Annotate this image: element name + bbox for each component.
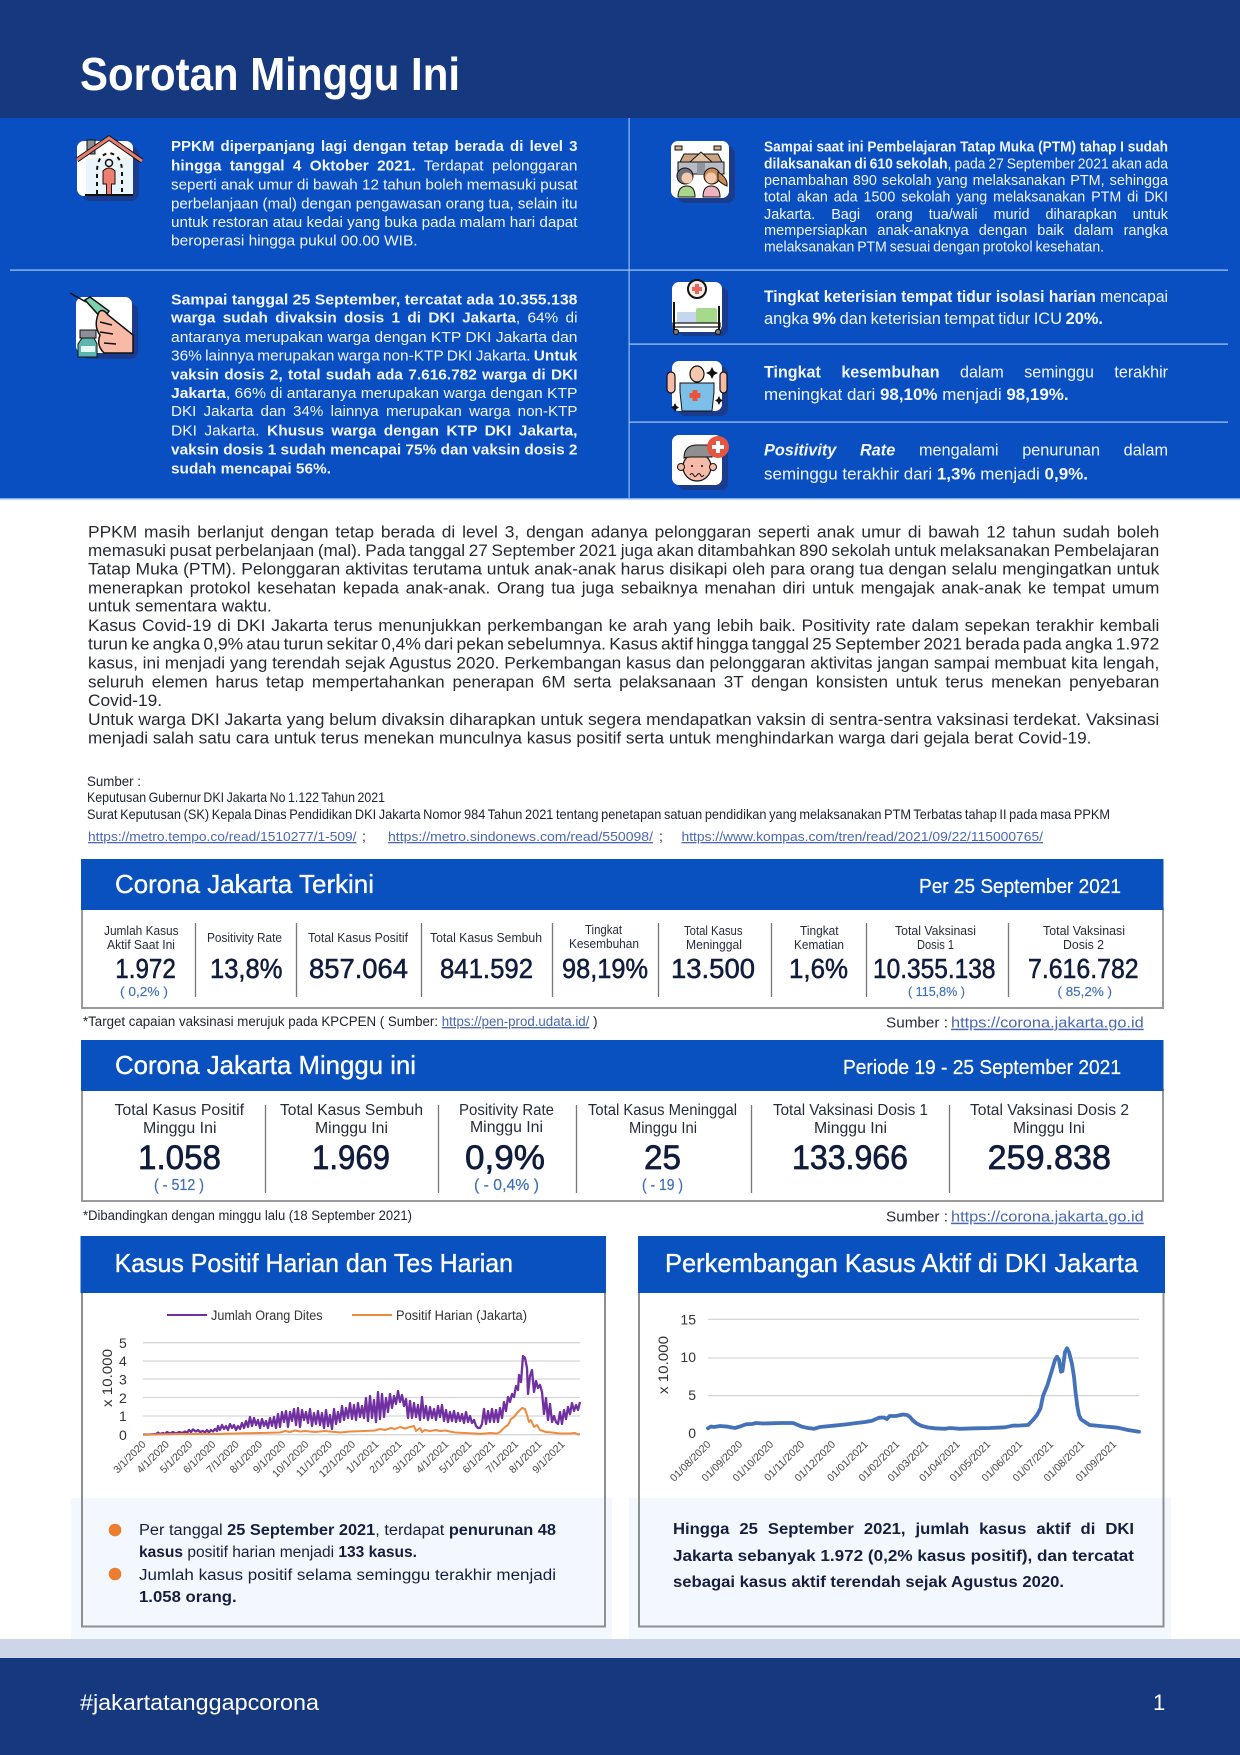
stat: weekly dose 2 bbox=[970, 1102, 1129, 1177]
text: positivity rate bbox=[764, 440, 1168, 484]
date: Per 25 September 2021 bbox=[919, 876, 1121, 898]
text: face-to-face schooling: dilaksanakan di 610 sekolah, pada 27 September 2021 akan ada bbox=[764, 156, 1169, 172]
text: PPKM extended: seperti anak umur di bawah 12 tahun boleh memasuki pusat bbox=[171, 176, 578, 194]
stat: weekly positive: Minggu Ini bbox=[143, 1120, 216, 1137]
source link bbox=[886, 1015, 1144, 1032]
stat: weekly deaths: Total Kasus Meninggal bbox=[588, 1102, 737, 1119]
text block: narrative summary: kasus, ini menjadi yang terendah sejak Agustus 2020. Perkembangan kasus dan pelonggaran aktivitas jangan sampai membuat kita lengah, bbox=[88, 653, 1159, 672]
x axis dates: 01/01/2021 bbox=[825, 1439, 871, 1484]
text block: narrative summary: memasuki pusat perbelanjaan (mal). Pada tanggal 27 September 2021 juga akan ditambahkan 890 sekolah untuk melaksanakan Pembelajaran bbox=[88, 541, 1159, 560]
x axis dates: 1/1/2021 bbox=[344, 1439, 381, 1476]
stat: vaccine dose 1: Dosis 1 bbox=[917, 937, 954, 952]
hashtag: #jakartatanggapcorona bbox=[80, 1690, 320, 1715]
stat: weekly positivity: 0,9% bbox=[465, 1139, 545, 1177]
stat: weekly recovered: Total Kasus Sembuh bbox=[280, 1102, 423, 1119]
text: PPKM extended: hingga tanggal 4 Oktober 2021. Terdapat pelonggaran bbox=[171, 158, 578, 174]
stat: weekly recovered: Minggu Ini bbox=[315, 1120, 388, 1137]
line chart: daily tests and positives: 4 bbox=[119, 1353, 127, 1369]
footnote: comparison: *Dibandingkan dengan minggu lalu (18 September 2021) bbox=[83, 1208, 412, 1223]
stat: recovery rate bbox=[562, 922, 648, 984]
text block: narrative summary: menjadi salah satu cara untuk terus menekan munculnya kasus positif serta untuk menghindarkan warga dari gejala berat Covid-19. bbox=[88, 728, 1091, 747]
x axis dates: 01/12/2020 bbox=[792, 1439, 838, 1484]
text: active case summary: Hingga 25 September 2021, jumlah kasus aktif di DKI bbox=[673, 1521, 1134, 1538]
text: PPKM extended: PPKM diperpanjang lagi dengan tetap berada di level 3 bbox=[171, 138, 578, 155]
text block: sources: ; bbox=[362, 828, 366, 844]
title: Sorotan Minggu Ini bbox=[80, 48, 460, 100]
text: positivity rate: Positivity Rate mengalami penurunan dalam bbox=[764, 440, 1168, 460]
panel: daily cases and tests bbox=[71, 1236, 612, 1639]
text: vaccination progress: 36% lainnya merupakan warga non-KTP DKI Jakarta. Untuk bbox=[171, 348, 578, 364]
icon: hospital bed bbox=[672, 280, 728, 336]
text block: sources: Keputusan Gubernur DKI Jakarta No 1.122 Tahun 2021 bbox=[87, 789, 385, 805]
text block: sources: https://metro.sindonews.com/read/550098/ bbox=[388, 829, 653, 844]
icon: sick face with plus badge bbox=[672, 435, 729, 490]
text block: sources: https://metro.tempo.co/read/1510277/1-509/ bbox=[88, 829, 357, 844]
text block: narrative summary: Covid-19. bbox=[88, 691, 162, 710]
text: face-to-face schooling: total akan ada 1500 sekolah yang melaksanakan PTM di DKI bbox=[764, 190, 1168, 206]
text: bed occupancy: angka 9% dan keterisian tempat tidur ICU 20%. bbox=[764, 309, 1103, 328]
panel: Corona Jakarta Terkini bbox=[81, 859, 1164, 1008]
source link: https://corona.jakarta.go.id bbox=[951, 1209, 1144, 1226]
text block: sources bbox=[87, 773, 1110, 844]
text: positivity rate: seminggu terakhir dari 1,3% menjadi 0,9%. bbox=[764, 464, 1088, 484]
text: active case summary bbox=[673, 1521, 1134, 1591]
text: vaccination progress: vaksin dosis 1 sudah mencapai 75% dan vaksin dosis 2 bbox=[171, 442, 578, 458]
heading: Kasus Positif Harian dan Tes Harian bbox=[115, 1248, 513, 1278]
text: vaccination progress: warga sudah divaksin dosis 1 di DKI Jakarta , 64% di bbox=[170, 310, 578, 326]
x axis dates bbox=[111, 1439, 568, 1480]
source link: Sumber : bbox=[886, 1209, 948, 1226]
text: recovery rate: Tingkat kesembuhan dalam seminggu terakhir bbox=[764, 362, 1168, 382]
stat: total deaths: Total Kasus bbox=[684, 923, 743, 938]
line chart: daily tests and positives bbox=[99, 1308, 580, 1480]
stat: total positive: Total Kasus Positif bbox=[308, 930, 408, 945]
stat: total deaths: Meninggal bbox=[686, 937, 742, 952]
bullet list: daily cases: Per tanggal 25 September 2021 , terdapat penurunan 48 bbox=[139, 1522, 556, 1539]
stat: total positive: 857.064 bbox=[309, 953, 408, 984]
text: vaccination progress: sudah mencapai 56%. bbox=[171, 460, 331, 478]
text block: narrative summary: Kasus Covid-19 di DKI Jakarta terus menunjukkan perkembangan ke arah yang lebih baik. Positivity rate dalam sepekan terakhir kembali bbox=[88, 616, 1159, 635]
x axis dates: 8/1/2020 bbox=[228, 1439, 265, 1476]
text: vaccination progress: DKI Jakarta. Khusus warga dengan KTP DKI Jakarta, bbox=[171, 422, 578, 440]
stat: positivity rate: Positivity Rate bbox=[207, 930, 282, 945]
text: vaccination progress: Sampai tanggal 25 September, tercatat ada 10.355.138 bbox=[171, 292, 578, 308]
source link: https://corona.jakarta.go.id bbox=[951, 1015, 1144, 1032]
x axis dates: 8/1/2021 bbox=[507, 1439, 544, 1476]
icon: hand with syringe bbox=[70, 293, 138, 359]
stat: weekly positivity bbox=[459, 1102, 554, 1194]
stat: weekly positive: 1.058 bbox=[138, 1139, 221, 1177]
x axis dates: 01/08/2020 bbox=[668, 1439, 714, 1484]
text: PPKM extended: untuk restoran atau kedai yang buka pada malam hari dapat bbox=[171, 214, 578, 231]
text: active case summary: Jakarta sebanyak 1.972 (0,2% kasus positif), dan tercatat bbox=[673, 1548, 1134, 1565]
x axis dates: 01/05/2021 bbox=[947, 1439, 993, 1484]
stat: total recovered: 841.592 bbox=[440, 953, 533, 984]
text block: sources: Sumber : bbox=[87, 773, 141, 789]
text: face-to-face schooling: melaksanakan PTM sesuai dengan protokol kesehatan. bbox=[764, 240, 1104, 256]
stat: vaccine dose 1: Total Vaksinasi bbox=[895, 923, 976, 938]
x axis dates: 3/1/2020 bbox=[111, 1439, 149, 1476]
stat: weekly deaths: 25 bbox=[644, 1139, 681, 1177]
footnote: vaccination target: *Target capaian vaksinasi merujuk pada KPCPEN ( Sumber: https://pen-prod.udata.id/ ) bbox=[83, 1014, 597, 1029]
text: vaccination progress bbox=[170, 292, 578, 478]
line chart: active cases: 0 bbox=[688, 1425, 696, 1441]
text block: narrative summary: menerapkan protokol kesehatan kepada anak-anak. Orang tua juga sebaiknya menahan diri untuk mengajak anak-anak ke tempat umum bbox=[88, 578, 1159, 597]
text block: narrative summary: turun ke angka 0,9% atau turun sekitar 0,4% dari pekan sebelumnya. Kasus aktif hingga tanggal 25 September 2021 berada pada angka 1.972 bbox=[88, 634, 1159, 653]
x axis dates: 01/11/2020 bbox=[762, 1439, 807, 1484]
text block: sources: https://www.kompas.com/tren/read/2021/09/22/115000765/ bbox=[682, 829, 1043, 844]
line chart: active cases: 15 bbox=[680, 1312, 696, 1328]
icon: house with person bbox=[77, 138, 142, 201]
stat: weekly deaths: Minggu Ini bbox=[629, 1120, 697, 1137]
stat: weekly positive bbox=[114, 1102, 245, 1194]
text: active case summary: sebagai kasus aktif terendah sejak Agustus 2020. bbox=[673, 1574, 1064, 1591]
stat: recovery rate: Tingkat bbox=[585, 922, 622, 937]
x axis dates: 7/1/2021 bbox=[484, 1439, 521, 1476]
x axis dates: 3/1/2021 bbox=[391, 1439, 428, 1476]
stat: fatality rate bbox=[789, 923, 848, 984]
x axis dates: 5/1/2020 bbox=[158, 1439, 195, 1476]
line chart: daily tests and positives: 0 bbox=[119, 1427, 127, 1443]
stat: weekly positive: ( - 512 ) bbox=[154, 1177, 204, 1194]
x axis dates: 01/07/2021 bbox=[1010, 1439, 1056, 1484]
stat: weekly dose 2: Minggu Ini bbox=[1013, 1120, 1085, 1137]
x axis dates: 01/02/2021 bbox=[856, 1439, 902, 1484]
x axis dates: 6/1/2020 bbox=[181, 1439, 219, 1476]
x axis dates: 01/09/2020 bbox=[699, 1439, 745, 1484]
header band with title bbox=[0, 0, 1240, 118]
stat: active cases: ( 0,2% ) bbox=[120, 984, 168, 999]
line chart: daily tests and positives: 3 bbox=[119, 1372, 127, 1388]
source link bbox=[886, 1209, 1144, 1226]
text block: narrative summary: Untuk warga DKI Jakarta yang belum divaksin diharapkan untuk segera mendapatkan vaksin di sentra-sentra vaksinasi terdekat. Vaksinasi bbox=[88, 710, 1159, 729]
text: recovery rate bbox=[764, 362, 1168, 404]
stat: vaccine dose 2: 7.616.782 bbox=[1028, 953, 1139, 984]
stat: weekly positive: Total Kasus Positif bbox=[114, 1102, 245, 1119]
bullet list: daily cases: Jumlah kasus positif selama seminggu terakhir menjadi bbox=[139, 1567, 556, 1584]
heading: Corona Jakarta Minggu ini bbox=[115, 1050, 416, 1080]
stat: active cases: Jumlah Kasus bbox=[104, 923, 179, 938]
stat: active cases bbox=[104, 923, 179, 999]
stat: weekly recovered bbox=[280, 1102, 423, 1177]
bullet list: daily cases: kasus positif harian menjadi 133 kasus. bbox=[139, 1544, 417, 1561]
text: face-to-face schooling: mempersiapkan anak-anaknya dengan baik dalam rangka bbox=[764, 223, 1169, 239]
stat: weekly dose 1: Minggu Ini bbox=[814, 1120, 887, 1137]
line chart: daily tests and positives: 2 bbox=[119, 1390, 127, 1406]
stat: weekly positivity: Minggu Ini bbox=[470, 1119, 543, 1136]
stat: active cases: Aktif Saat Ini bbox=[107, 937, 175, 952]
stat: fatality rate: Tingkat bbox=[800, 923, 839, 938]
footer bbox=[0, 1658, 1240, 1755]
text: PPKM extended: perbelanjaan (mal) dengan pengawasan orang tua, selain itu bbox=[171, 196, 578, 212]
x axis dates: 01/03/2021 bbox=[885, 1439, 931, 1484]
stat: weekly dose 1 bbox=[773, 1102, 928, 1177]
stat: total recovered bbox=[430, 930, 542, 984]
text: PPKM extended bbox=[171, 138, 578, 250]
text: bed occupancy bbox=[764, 287, 1168, 328]
text: vaccination progress: vaksin dosis 2, total sudah ada 7.616.782 warga di DKI bbox=[171, 366, 578, 384]
text block: narrative summary: Tatap Muka (PTM). Pelonggaran aktivitas terutama untuk anak-anak harus disikapi oleh para orang tua dengan selalu mengingatkan untuk bbox=[88, 559, 1160, 578]
x axis dates: 01/08/2021 bbox=[1041, 1439, 1087, 1484]
stat: fatality rate: 1,6% bbox=[789, 953, 848, 984]
stat: weekly dose 2: 259.838 bbox=[988, 1139, 1111, 1177]
band above footer bbox=[0, 1639, 1240, 1658]
text: face-to-face schooling: Sampai saat ini Pembelajaran Tatap Muka (PTM) tahap I sudah bbox=[764, 140, 1168, 156]
stat: vaccine dose 1: ( 115,8% ) bbox=[908, 984, 965, 999]
stat: vaccine dose 2: Dosis 2 bbox=[1063, 937, 1104, 952]
stat: total positive bbox=[308, 930, 408, 984]
legend bbox=[167, 1308, 527, 1323]
x axis dates: 01/10/2020 bbox=[730, 1439, 776, 1484]
stat: weekly deaths: ( - 19 ) bbox=[642, 1177, 683, 1194]
stat: fatality rate: Kematian bbox=[794, 937, 844, 952]
heading: Perkembangan Kasus Aktif di DKI Jakarta bbox=[665, 1248, 1139, 1278]
stat: weekly dose 1: Total Vaksinasi Dosis 1 bbox=[773, 1102, 928, 1119]
stat: vaccine dose 1 bbox=[873, 923, 996, 999]
line chart: daily tests and positives: 5 bbox=[119, 1335, 127, 1351]
x axis dates: 12/1/2020 bbox=[317, 1439, 358, 1480]
icon: recovered patient bbox=[667, 361, 728, 416]
legend: Jumlah Orang Dites bbox=[211, 1308, 323, 1323]
icon: school with students bbox=[671, 141, 735, 203]
stat: total deaths bbox=[671, 923, 755, 984]
text: vaccination progress: DKI Jakarta dan 34% lainnya merupakan warga non-KTP bbox=[171, 403, 578, 420]
x axis dates: 01/09/2021 bbox=[1073, 1439, 1119, 1484]
x axis dates: 01/04/2021 bbox=[917, 1439, 963, 1484]
stat: weekly positivity: Positivity Rate bbox=[459, 1102, 554, 1119]
line chart: daily tests and positives: x 10.000 bbox=[99, 1349, 115, 1407]
panel: highlights bbox=[0, 118, 1240, 500]
stat: vaccine dose 1: 10.355.138 bbox=[873, 953, 996, 984]
stat: active cases: 1.972 bbox=[115, 953, 176, 984]
x axis dates: 9/1/2021 bbox=[530, 1439, 568, 1476]
x axis dates: 5/1/2021 bbox=[437, 1439, 475, 1476]
stat: recovery rate: 98,19% bbox=[562, 953, 648, 984]
stat: weekly dose 2: Total Vaksinasi Dosis 2 bbox=[970, 1102, 1129, 1119]
x axis dates bbox=[668, 1439, 1119, 1484]
legend: Positif Harian (Jakarta) bbox=[396, 1308, 527, 1323]
x axis dates: 4/1/2021 bbox=[414, 1439, 451, 1476]
text: PPKM extended: beroperasi hingga pukul 00.00 WIB. bbox=[171, 232, 418, 250]
text: vaccination progress: antaranya merupakan warga dengan KTP DKI Jakarta dan bbox=[171, 329, 578, 346]
period: Periode 19 - 25 September 2021 bbox=[843, 1057, 1121, 1079]
panel: active case trend bbox=[629, 1236, 1171, 1639]
x axis dates: 2/1/2021 bbox=[367, 1439, 405, 1476]
source link: Sumber : bbox=[886, 1015, 948, 1032]
text block: narrative summary bbox=[88, 522, 1160, 747]
x axis dates: 9/1/2020 bbox=[251, 1439, 288, 1476]
text: bed occupancy: Tingkat keterisian tempat tidur isolasi harian mencapai bbox=[764, 287, 1168, 306]
stat: total deaths: 13.500 bbox=[671, 953, 755, 984]
x axis dates: 6/1/2021 bbox=[460, 1439, 498, 1476]
x axis dates: 01/06/2021 bbox=[979, 1439, 1025, 1484]
text: face-to-face schooling: penambahan 890 sekolah yang melaksanakan PTM, sehingga bbox=[764, 173, 1169, 189]
x axis dates: 4/1/2020 bbox=[135, 1439, 172, 1476]
stat: weekly dose 1: 133.966 bbox=[792, 1139, 908, 1177]
x axis dates: 7/1/2020 bbox=[204, 1439, 242, 1476]
text block: narrative summary: seluruh elemen harus tetap mempertahankan penerapan 6M serta pelaksanaan 3T dengan konsisten untuk terus menekan penyebaran bbox=[88, 672, 1159, 691]
stat: positivity rate bbox=[207, 930, 282, 984]
stat: weekly deaths bbox=[588, 1102, 737, 1194]
text block: sources: ; bbox=[659, 828, 663, 844]
stat: positivity rate: 13,8% bbox=[210, 953, 282, 984]
line chart: active cases: 5 bbox=[688, 1387, 696, 1403]
stat: vaccine dose 2: Total Vaksinasi bbox=[1043, 923, 1125, 938]
text block: narrative summary: untuk sementara waktu. bbox=[88, 597, 272, 616]
text block: sources: Surat Keputusan (SK) Kepala Dinas Pendidikan DKI Jakarta Nomor 984 Tahun 2021 tentang penetapan satuan pendidikan yang melaksanakan PTM Terbatas tahap II pada masa PPKM bbox=[87, 806, 1110, 822]
bullet list: daily cases bbox=[109, 1522, 556, 1606]
line chart: active cases: x 10.000 bbox=[655, 1336, 671, 1394]
line chart: active cases: 10 bbox=[680, 1349, 696, 1365]
stat: vaccine dose 2: ( 85,2% ) bbox=[1058, 984, 1112, 999]
text block: narrative summary: PPKM masih berlanjut dengan tetap berada di level 3, dengan adanya pelonggaran seperti anak umur di bawah 12 tahun sudah boleh bbox=[88, 522, 1159, 541]
stat: recovery rate: Kesembuhan bbox=[569, 936, 639, 951]
panel: Corona Jakarta Minggu ini bbox=[81, 1040, 1164, 1201]
text: vaccination progress: Jakarta, 66% di antaranya merupakan warga dengan KTP bbox=[171, 385, 578, 402]
line chart: active cases bbox=[655, 1312, 1139, 1484]
text: recovery rate: meningkat dari 98,10% menjadi 98,19%. bbox=[764, 385, 1069, 404]
x axis dates: 11/1/2020 bbox=[294, 1439, 335, 1480]
text: face-to-face schooling: Jakarta. Bagi orang tua/wali murid diharapkan untuk bbox=[764, 207, 1169, 223]
stat: weekly recovered: 1.969 bbox=[312, 1139, 390, 1177]
heading: Corona Jakarta Terkini bbox=[115, 869, 374, 899]
line chart: daily tests and positives: 1 bbox=[119, 1408, 127, 1424]
bullet list: daily cases: 1.058 orang. bbox=[139, 1589, 237, 1606]
x axis dates: 10/1/2020 bbox=[270, 1439, 312, 1480]
stat: total recovered: Total Kasus Sembuh bbox=[430, 930, 542, 945]
stat: weekly positivity: ( - 0,4% ) bbox=[474, 1177, 539, 1194]
stat: vaccine dose 2 bbox=[1028, 923, 1139, 999]
page number: 1 bbox=[1153, 1690, 1165, 1715]
text: face-to-face schooling bbox=[764, 140, 1169, 256]
